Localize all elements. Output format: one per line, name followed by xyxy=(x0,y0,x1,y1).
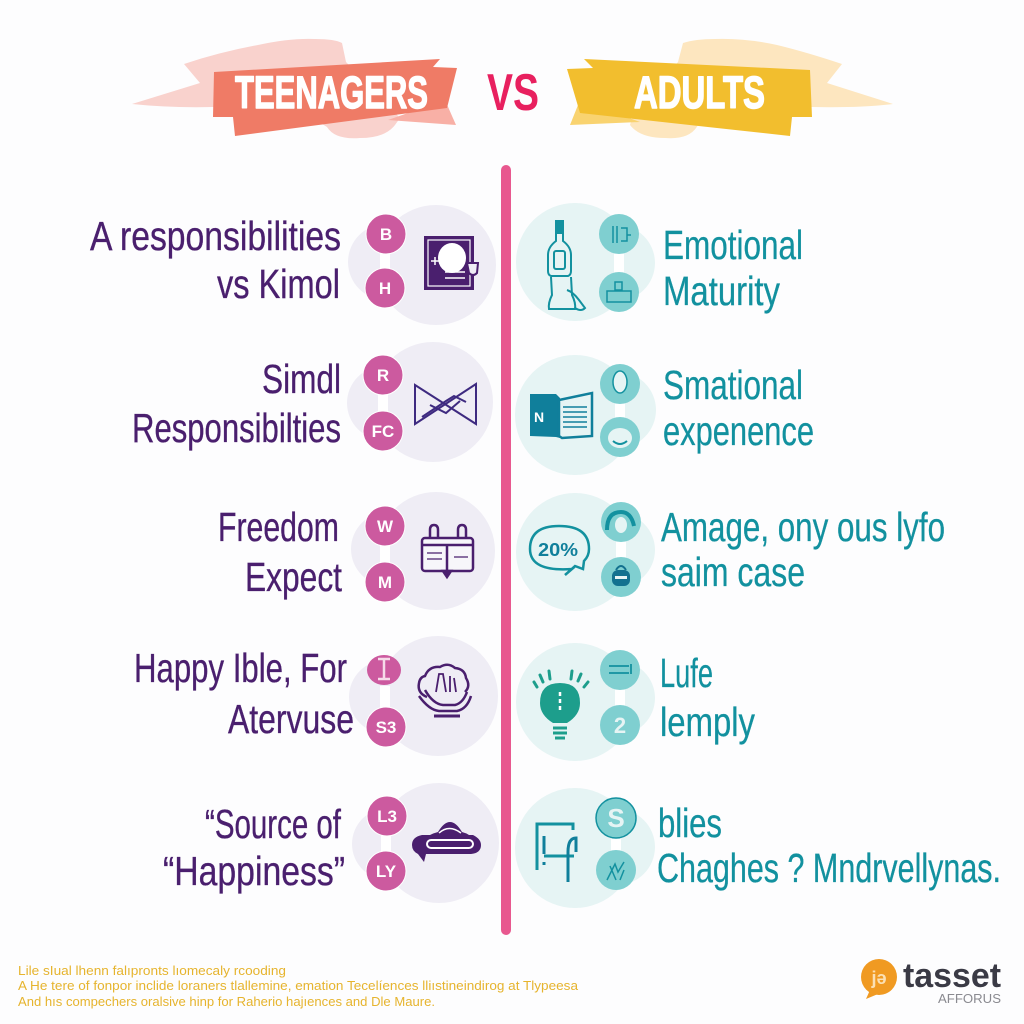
text: Smational expenence xyxy=(663,362,814,454)
text: Happy Ible, For Atervuse xyxy=(134,645,354,742)
badges W and M xyxy=(365,506,405,602)
text: Amage, ony ous lyfo saim case: saim case xyxy=(661,549,805,595)
icon: bottle xyxy=(548,221,585,310)
text: Amage, ony ous lyfo saim case: Amage, ony ous lyfo xyxy=(661,504,945,550)
blob background xyxy=(516,643,655,761)
icon: 20% bubble xyxy=(530,526,589,575)
badges R and FC: FC xyxy=(372,422,394,441)
row 3 left: freedom xyxy=(218,492,495,610)
badges R and FC: R xyxy=(377,366,389,385)
badges: S xyxy=(607,803,625,833)
row 4 left: happy xyxy=(134,636,498,756)
badges B and H: H xyxy=(379,279,391,298)
blob background xyxy=(349,636,498,756)
icon: cloud chair xyxy=(419,665,471,716)
badges: S3 xyxy=(376,718,396,737)
text: A responsibilities vs Kimol: A responsibilities xyxy=(90,213,341,259)
row 5 left: source of happiness xyxy=(163,783,499,903)
row 1 right: emotional maturity xyxy=(516,203,803,321)
logo: tasset: AFFORUS xyxy=(938,991,1001,1006)
text: Emotional Maturity xyxy=(663,222,803,314)
icon: open book: N xyxy=(534,409,544,425)
text: Source of Happiness: “Source of xyxy=(205,801,341,847)
blob background xyxy=(351,492,495,610)
text: Lufe lemply: lemply xyxy=(660,699,755,745)
text: A responsibilities vs Kimol: vs Kimol xyxy=(217,261,340,307)
text: Source of Happiness xyxy=(163,801,345,894)
badges xyxy=(596,798,636,890)
footer note: A He tere of fonpor inclide loraners tlallemine, emation Tecelíences lliıstineindirog at Tlypeesa xyxy=(18,979,578,993)
blob background xyxy=(515,788,655,908)
blob background xyxy=(347,342,493,462)
icon: light bulb xyxy=(534,671,588,738)
icon: framed face xyxy=(424,236,478,290)
badges B and H xyxy=(365,214,406,308)
badges xyxy=(600,364,640,457)
text: blies Chaghes: blies xyxy=(658,800,722,846)
icon: cloud speech xyxy=(412,822,481,862)
blob background xyxy=(516,203,655,321)
text: Emotional Maturity: Emotional xyxy=(663,222,803,268)
logo: tasset xyxy=(861,957,1001,1006)
text: Freedom Expect: Freedom xyxy=(218,504,339,550)
badges B and H: B xyxy=(380,225,392,244)
text: blies Chaghes xyxy=(657,800,1001,891)
text: Source of Happiness: “Happiness” xyxy=(163,848,345,894)
footer note: Lile sIual lhenn falıpronts lıomecaly rcooding xyxy=(18,964,286,978)
header: teenagers banner: TEENAGERS xyxy=(235,67,428,118)
footer note: And hıs compechers oralsive hinp for Raherio hajıences and Dle Maure. xyxy=(18,995,435,1009)
row 2 left: small responsibilities xyxy=(132,342,493,462)
badges: 2 xyxy=(614,713,626,738)
text: Freedom Expect: Expect xyxy=(245,554,342,600)
badges L3 and LY: L3 xyxy=(377,807,397,826)
icon: bow shape xyxy=(415,384,476,424)
text: A responsibilities vs Kimol xyxy=(90,213,341,307)
header: VS: VS xyxy=(487,64,539,122)
blob background xyxy=(515,355,656,475)
header: adults banner: ADULTS xyxy=(634,67,765,118)
text: Smational expenence: expenence xyxy=(663,408,814,454)
text: Simdl Responsibilties: Responsibilties xyxy=(132,405,341,451)
badges W and M: W xyxy=(377,517,394,536)
icon: 20% bubble: 20% xyxy=(538,540,578,560)
badges xyxy=(600,650,640,745)
text: Amage, ony ous lyfo saim case xyxy=(661,504,945,595)
icon: orange speech bubble: jə xyxy=(870,968,887,988)
text: Happy Ible, For Atervuse: Atervuse xyxy=(228,696,354,742)
blob background xyxy=(352,783,499,903)
text: Smational expenence: Smational xyxy=(663,362,803,408)
text: Lufe lemply: Lufe xyxy=(660,650,713,696)
row 2 right: book xyxy=(515,355,814,475)
icon: calendar book xyxy=(422,525,473,577)
badges L3 and LY xyxy=(366,796,407,891)
icon: orange speech bubble xyxy=(861,959,897,999)
badges R and FC xyxy=(363,355,403,451)
badges xyxy=(599,214,639,312)
row 3 right: speech bubble xyxy=(516,493,945,611)
badges xyxy=(366,655,406,747)
badges xyxy=(601,502,641,597)
logo: tasset: tasset xyxy=(903,957,1001,995)
text: Lufe lemply xyxy=(660,650,755,745)
header: teenagers banner xyxy=(132,39,457,138)
row 4 right: bulb xyxy=(516,643,755,761)
badges W and M: M xyxy=(378,573,392,592)
badges L3 and LY: LY xyxy=(376,862,397,881)
blob background xyxy=(516,493,655,611)
footer note xyxy=(18,964,578,1009)
text: Simdl Responsibilties: Simdl xyxy=(262,356,341,402)
text: Freedom Expect xyxy=(218,504,342,600)
icon: open book xyxy=(530,393,592,438)
icon: f frame xyxy=(537,824,576,882)
text: Emotional Maturity: Maturity xyxy=(663,268,780,314)
text: Simdl Responsibilties xyxy=(132,356,341,451)
header: adults banner xyxy=(567,39,893,138)
blob background xyxy=(348,205,496,325)
row 5 right: hashtag shape xyxy=(515,788,1001,908)
row 1 left: responsibilities xyxy=(90,205,496,325)
center divider xyxy=(501,165,511,935)
text: Happy Ible, For Atervuse: Happy Ible, For xyxy=(134,645,347,691)
